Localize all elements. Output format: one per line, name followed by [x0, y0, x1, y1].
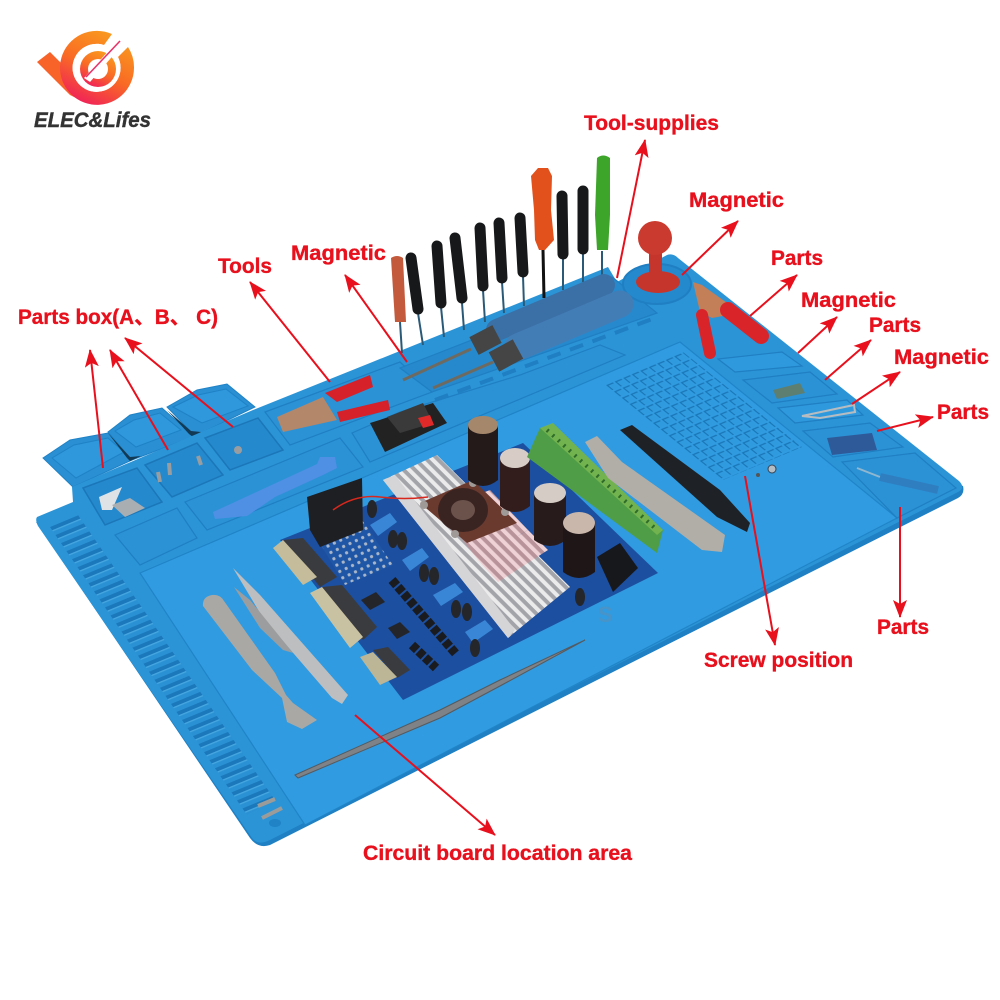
label: screw position: Screw position [704, 649, 853, 672]
arrow: parts 3 [877, 417, 933, 431]
speaker terminal [370, 403, 447, 452]
red screwdriver [391, 256, 406, 322]
right trays [718, 352, 956, 518]
arrow: magnetic 3 [852, 372, 900, 404]
right metal spatula [585, 436, 725, 552]
label: tools: Tools [218, 255, 272, 278]
round dish [623, 264, 691, 304]
solder area [315, 520, 393, 585]
label: magnetic 2: Magnetic [801, 289, 896, 312]
metal tweezers [233, 568, 348, 704]
arrow: tools [250, 282, 330, 382]
heat sink [383, 455, 570, 638]
small shafts [400, 250, 602, 353]
label: parts 1: Parts [771, 247, 823, 270]
slot row [435, 318, 655, 400]
arrow: parts 4 [899, 507, 901, 617]
left alligator clip [277, 375, 390, 432]
circuit board [273, 416, 663, 700]
arrow: parts 1 [750, 275, 797, 316]
fan [420, 479, 517, 543]
lid hinge slits [108, 410, 201, 461]
recessed board panel [140, 342, 897, 825]
orange screwdriver [531, 168, 554, 250]
blue screwdrivers [403, 285, 620, 388]
black heat block [307, 478, 363, 547]
ic rows [392, 580, 456, 668]
fan wire [333, 497, 428, 510]
corner dimples [269, 819, 281, 827]
arrow: magnetic left [345, 275, 407, 362]
blue pry tool [213, 457, 337, 519]
arrows: parts box [90, 338, 233, 468]
arrow: parts 2 [825, 340, 871, 380]
pcb [280, 443, 658, 700]
parts in boxes [99, 446, 242, 517]
label: magnetic top: Magnetic [689, 189, 784, 212]
logo mark [37, 31, 134, 105]
screw position marks [756, 465, 776, 477]
label: magnetic left: Magnetic [291, 242, 386, 265]
faint watermark: S [598, 602, 613, 627]
label: parts box: Parts box(A、B、 C) [18, 306, 218, 329]
dip switches [370, 513, 493, 643]
connector 2 [310, 585, 377, 648]
screws at corner [258, 799, 282, 818]
mat lip shadow [36, 484, 963, 846]
arrow: magnetic top [682, 221, 738, 275]
terminal block [527, 423, 663, 553]
small capacitors [367, 500, 585, 657]
relay [597, 543, 638, 592]
right alligator clip [693, 282, 761, 353]
green screwdriver [595, 156, 610, 250]
capacitor 1 [468, 416, 498, 486]
silicone repair mat [36, 254, 963, 846]
mat body [36, 254, 962, 843]
hole grid [605, 352, 802, 480]
black tweezers [620, 425, 750, 532]
capacitor 2 [500, 448, 530, 512]
label: parts 4: Parts [877, 616, 929, 639]
upper trays [115, 277, 657, 565]
label: parts 2: Parts [869, 314, 921, 337]
connector 1 [273, 538, 337, 587]
label: magnetic 3: Magnetic [894, 346, 989, 369]
metal spudger left [203, 595, 317, 729]
red ball stand [636, 221, 680, 293]
connector 3 [360, 647, 410, 685]
logo wordmark: ELEC&Lifes [34, 109, 151, 132]
arrow: circuit board location [355, 715, 495, 835]
right tray parts [773, 383, 938, 490]
capacitor 4 [563, 512, 595, 578]
ribbed strip [50, 515, 275, 815]
arrow: tool-supplies [617, 140, 645, 278]
logo [34, 31, 151, 132]
arrow: magnetic 2 [798, 317, 837, 353]
label: parts 3: Parts [937, 401, 989, 424]
label: circuit board location area: Circuit board location area [363, 842, 632, 865]
arrow: screw position [745, 476, 775, 645]
capacitor 3 [534, 483, 566, 546]
parts box A B C [83, 418, 283, 525]
long dental pick [295, 640, 585, 778]
screwdriver row [391, 156, 610, 353]
lids of parts boxes [43, 384, 255, 487]
label: tool-supplies: Tool-supplies [584, 112, 719, 135]
black handles [411, 191, 583, 309]
